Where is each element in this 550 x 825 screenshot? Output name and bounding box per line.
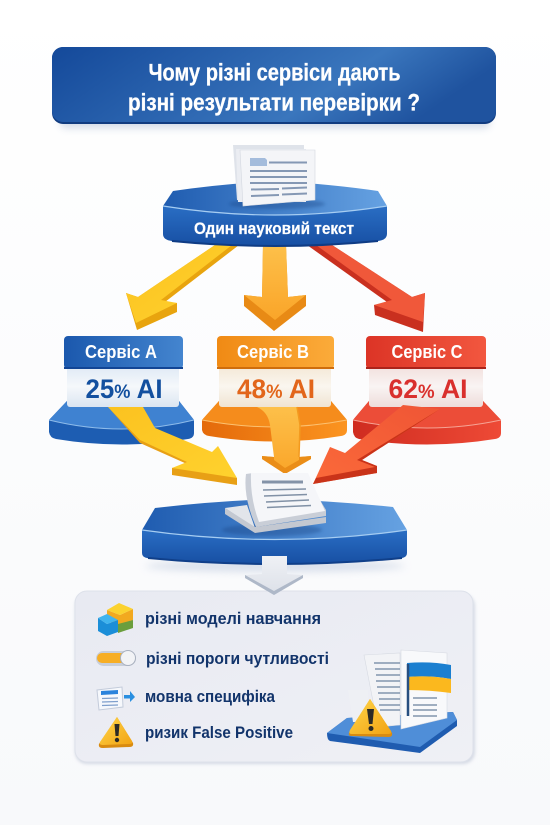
top platform <box>163 181 387 246</box>
base B <box>202 401 347 442</box>
card: service A: Сервіс A <box>85 342 157 362</box>
icon: sensitivity toggle <box>96 650 136 666</box>
arrow: source to service C <box>307 245 425 332</box>
icon: documents with flag on platform <box>327 650 457 753</box>
arrow: source to service B <box>244 245 306 331</box>
factor: false positive risk: ризик False Positive <box>145 724 293 742</box>
icon: source document <box>229 145 325 209</box>
arrow: result to factors <box>245 556 303 595</box>
icon: model blocks <box>98 603 133 636</box>
base C <box>353 401 501 444</box>
card: service A <box>49 336 194 444</box>
panel: factors <box>75 591 475 764</box>
arrow: service C to result <box>313 405 440 484</box>
icon: result document stack <box>222 473 326 536</box>
icon: warning <box>99 717 133 748</box>
card: service A: 25% AI <box>86 374 162 404</box>
icon: language document <box>97 687 135 710</box>
card: service C: Сервіс C <box>392 342 462 362</box>
factor: language specifics: мовна специфіка <box>145 688 276 706</box>
result platform <box>142 499 407 572</box>
card: service C: 62% AI <box>388 374 468 404</box>
arrow: service A to result <box>108 407 237 485</box>
factor: sensitivity thresholds: різні пороги чутливості <box>146 650 329 668</box>
arrow: source to service A <box>126 245 239 330</box>
title banner <box>52 47 496 128</box>
title banner: різні результати перевірки ? <box>128 90 420 116</box>
factor: training models: різні моделі навчання <box>145 610 321 628</box>
card: service B <box>202 336 347 442</box>
arrow: service B to result <box>257 407 311 474</box>
card: service C <box>353 336 501 444</box>
base A <box>49 401 194 444</box>
card: service B: Сервіс B <box>237 342 309 362</box>
source label: Один науковий текст <box>194 219 354 238</box>
title banner: Чому різні сервіси дають <box>148 60 400 86</box>
card: service B: 48% AI <box>237 374 315 404</box>
